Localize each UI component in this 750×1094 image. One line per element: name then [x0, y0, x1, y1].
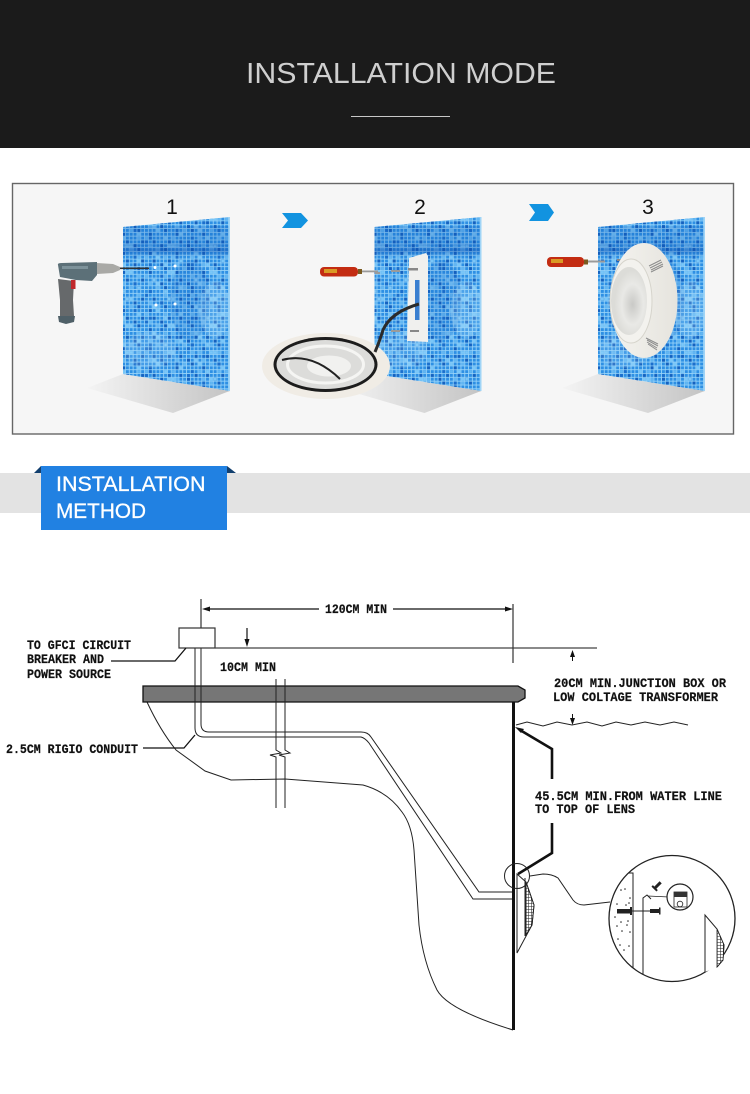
tile wall 3: [562, 214, 707, 413]
bracket inset: [667, 884, 693, 910]
callout wire: [530, 874, 610, 905]
header band: [0, 0, 750, 148]
step number 3: 3: [642, 196, 654, 219]
section banner: [0, 466, 750, 530]
label: 45.5cm from water line: 45.5CM MIN.FROM WATER LINE: [535, 790, 722, 804]
pool lamp section: [517, 874, 534, 953]
drill holes: [154, 264, 176, 306]
lamp plate: [643, 895, 651, 975]
water line: [516, 722, 688, 726]
icon: electric drill: [58, 262, 149, 324]
pool deck: [143, 686, 525, 702]
icon: screwdriver step 3: [547, 257, 629, 267]
label: 45.5cm from water line: [515, 727, 722, 874]
detail: magnified mounting: [609, 856, 735, 982]
icon: installed pool lamp: [610, 243, 678, 358]
dimension: 120cm: [201, 599, 513, 663]
diagram: installation method: [6, 599, 735, 1030]
conduit: [195, 648, 513, 899]
junction box: [179, 628, 215, 648]
title: INSTALLATION MODE: [246, 58, 556, 90]
banner heading: METHOD: [56, 500, 146, 523]
label: GFCI breaker: POWER SOURCE: [27, 668, 111, 682]
label: 20cm junction box: 20CM MIN.JUNCTION BOX OR: [554, 677, 726, 691]
panel: three installation steps: [12, 184, 734, 434]
loose screw: [651, 880, 663, 892]
dimension: 10cm: 10CM MIN: [220, 661, 276, 675]
tile wall 2: [338, 214, 484, 413]
icon: loose screws step 2: [375, 270, 400, 332]
wall anchor and screw: [617, 907, 660, 915]
pool outline: [147, 702, 513, 1030]
icon: lamp back with ring: [262, 333, 390, 399]
icon: screwdriver step 2: [320, 267, 378, 276]
ground level line: [215, 647, 597, 649]
pool wall: [512, 702, 515, 1030]
label: 20cm junction box: LOW COLTAGE TRANSFORMER: [553, 691, 718, 705]
step number 2: 2: [414, 196, 426, 219]
label: GFCI breaker: BREAKER AND: [27, 653, 104, 667]
tile wall 1: [87, 214, 232, 413]
step number 1: 1: [166, 196, 178, 219]
detail callout circle on wall: [504, 864, 530, 888]
banner heading: INSTALLATION: [56, 473, 205, 496]
lamp edge: [705, 915, 724, 972]
dimension: 120cm: 120CM MIN: [325, 603, 387, 617]
icon: mounting bracket: [407, 253, 428, 342]
arrow: step 2 to 3: [529, 204, 554, 221]
label: rigid conduit: [6, 735, 195, 757]
label: 45.5cm from water line: TO TOP OF LENS: [535, 803, 635, 817]
arrow: step 1 to 2: [282, 213, 308, 228]
banner heading: [56, 473, 205, 523]
label: rigid conduit: 2.5CM RIGIO CONDUIT: [6, 743, 138, 757]
label: GFCI breaker: [27, 639, 186, 682]
second pipe with break: [270, 679, 290, 808]
label: 20cm junction box: [553, 650, 726, 725]
label: GFCI breaker: TO GFCI CIRCUIT: [27, 639, 131, 653]
icon: power cable: [375, 304, 419, 352]
dimension: 10cm: [220, 628, 276, 675]
